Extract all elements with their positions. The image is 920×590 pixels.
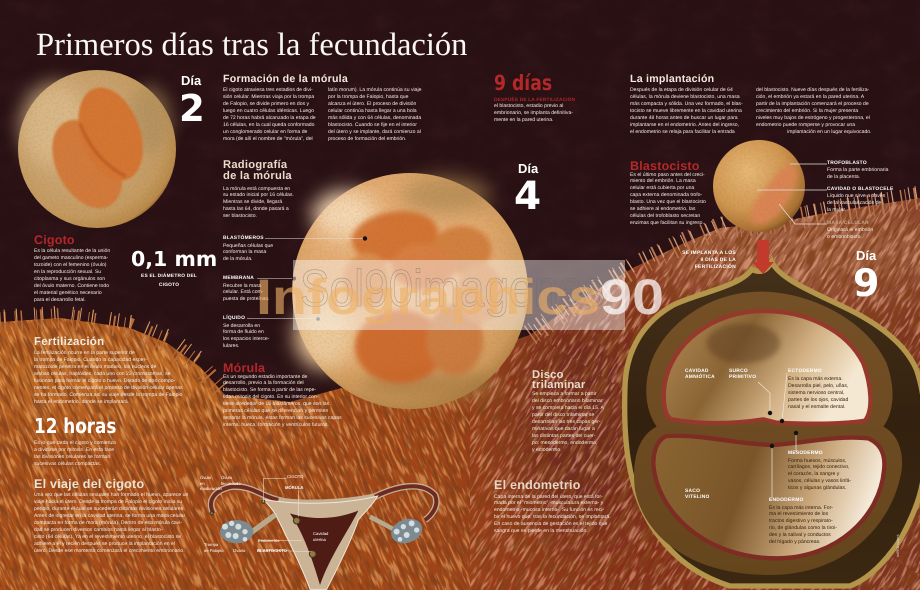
text: mesodermo: Forma huesos, músculos, <box>788 458 846 464</box>
text <box>223 322 270 349</box>
day 4 marker <box>514 161 541 219</box>
text <box>34 492 188 554</box>
label: ovario: Ovario <box>233 548 245 553</box>
text column 1 <box>223 87 316 142</box>
heading: Radiografía <box>223 159 287 171</box>
label: endometrio: Endometrio <box>258 538 279 543</box>
panel: radiografía de la mórula <box>223 159 294 219</box>
text column 2: alcanza el útero. El proceso de división <box>328 101 416 107</box>
text <box>494 103 573 123</box>
text: trofoblasto: de la placenta. <box>827 174 860 180</box>
text <box>34 248 110 303</box>
heading: Formación de la mórula <box>223 73 348 85</box>
embryo section labels <box>684 368 874 548</box>
day 9 marker <box>851 249 881 301</box>
text: en la reproducción sexual. Su <box>34 269 101 275</box>
text: celular está cubierta por una <box>630 185 694 191</box>
text: po: mesodermo, endodermo, <box>532 440 597 446</box>
text column 2: ción, el embrión ya estará en la pared uterina. A <box>756 94 864 100</box>
label: mórula: MÓRULA <box>285 485 303 490</box>
text: endodermo: tractos digestivo y respirato- <box>769 518 833 524</box>
label: trompa de falopio: de Falopio <box>204 548 224 553</box>
text: Recubre la masa <box>223 282 262 288</box>
illustration: blastocyst <box>713 140 805 232</box>
label: cavidad amniótica <box>685 369 715 382</box>
heading: BLASTÓMEROS <box>223 236 264 241</box>
text: ser blastocisto. <box>223 213 257 219</box>
text column 1: sión celular. Mientras viaja por la trompa <box>223 94 314 100</box>
text: endodermo: Es la capa más interna. For- <box>769 504 833 510</box>
text column 2 <box>756 87 872 135</box>
text: cisto (64 células). Ya en el revestimiento uterino, el blastocisto se <box>34 534 181 540</box>
text column 1: de Falopio, se divide primero en dos y <box>223 101 309 107</box>
text: bir el huevo que, tras la fecundación, se implantará. <box>494 514 611 520</box>
text <box>630 172 706 227</box>
label: óvulo fecundado: fecundado <box>221 481 241 486</box>
text: blasto. Una vez que el blastocisto <box>630 199 706 205</box>
label: cavidad amniótica: AMNIÓTICA <box>685 375 715 380</box>
text: Pequeñas células que <box>223 242 273 248</box>
text <box>34 350 183 405</box>
text: Se empieza a formar a partir <box>532 391 597 397</box>
text: tiene alrededor de 16 blastómeros, que son las <box>223 401 329 407</box>
text: desarrollan las tres capas ger- <box>532 419 601 425</box>
heading: Cigoto <box>34 233 75 247</box>
text: del gameto masculino (esperma- <box>34 255 108 261</box>
text: La mórula está compuesta en <box>223 186 290 192</box>
heading: Mórula <box>223 361 265 375</box>
label: líquido <box>223 314 320 349</box>
text: Se desarrolla en <box>223 322 260 328</box>
leaders and dots <box>684 368 874 548</box>
fur tips along the endometrium edge <box>0 192 920 395</box>
title: Primeros días tras la fecundación <box>36 27 467 63</box>
day 9 number: 9 <box>853 261 879 305</box>
yolk sac <box>653 436 884 558</box>
callout: se implanta: FERTILIZACIÓN <box>695 264 736 270</box>
text column 1: de 72 horas habrá alcanzado la etapa de <box>223 115 316 121</box>
text: endodermo: ma el revestimiento de los <box>769 511 828 517</box>
text column 1: Después de la etapa de división celular de 64 <box>630 87 733 93</box>
uterus diagram labels <box>200 474 328 553</box>
text column 1: durante 48 horas antes de buscar un lugar para <box>630 115 738 121</box>
text: periplo, durante el cual se sucederán distintas divisiones celulares. <box>34 506 185 512</box>
text column 1: tocisto se mueve libremente en la cavidad uterina <box>630 108 742 114</box>
text: capa externa denominada trofo- <box>630 192 702 198</box>
day 2 marker <box>179 73 205 130</box>
illustration: morula, day 4 <box>292 173 528 409</box>
text: separar la mórula, éstas forman las sucesivas capas <box>223 415 342 421</box>
label: saco vitelino: SACO <box>685 489 700 494</box>
label: óvulo en maduración <box>200 475 222 491</box>
label: surco primitivo: PRIMITIVO <box>729 375 756 380</box>
heading: El viaje del cigoto <box>34 477 144 491</box>
day 2 label: Día <box>181 73 201 88</box>
text column 2: blastocisto. Cuando se fije en el interior <box>328 122 417 128</box>
text: En caso de ausencia de gestación es el tejido que <box>494 521 607 527</box>
text <box>223 242 273 262</box>
text: enzimas que facilitan su ingreso. <box>630 220 704 226</box>
text: minativas que darán lugar a <box>532 426 595 432</box>
text: mada por el "miometrio" -musculatura externa- y <box>494 500 603 506</box>
panel: el endometrio <box>494 478 616 534</box>
caption: ES EL DIÁMETRO DEL <box>141 274 197 279</box>
text: trofoblasto <box>827 167 888 181</box>
heading: LÍQUIDO <box>223 316 245 321</box>
text: fusionan para formar el cigoto o huevo. Dotado de dos compo- <box>34 378 175 384</box>
text: mesodermo: el corazón, la sangre y <box>788 471 839 477</box>
callout: 0,1 mm <box>131 247 217 288</box>
text <box>223 186 294 219</box>
label: mesodermo: MESODERMO <box>788 451 823 456</box>
text: cavidad: de la vascularización de <box>827 200 881 206</box>
text: Es la célula resultante de la unión <box>34 248 110 254</box>
text column 2: celular continúa hasta llegar a una bola <box>328 108 417 114</box>
text column 1: 16 células, en la cual queda conformado <box>223 122 314 128</box>
text: ectodermo: sistema nervioso central, <box>788 390 844 396</box>
panel: disco trilaminar <box>532 370 620 454</box>
panel: fertilización <box>34 336 183 405</box>
leader and dot <box>265 236 368 241</box>
heading: MEMBRANA <box>223 276 254 281</box>
text: la trompa de Falopio. Cuando la capacidad esper- <box>34 357 147 363</box>
text: del disco embrionario bilaminar <box>532 398 602 404</box>
heading: El endometrio <box>494 478 581 492</box>
label: óvulo en maduración: Óvulo <box>200 475 211 480</box>
label: surco primitivo <box>729 369 756 382</box>
heading: trilaminar <box>532 379 585 391</box>
text: Una vez que las células sexuales han formado el huevo, aparece un <box>34 492 188 498</box>
text column 1: luego en cuatro células idénticas. Luego <box>223 108 314 114</box>
heading <box>532 370 585 390</box>
text: ectodermo: nasal y el esmalte dental. <box>788 404 845 410</box>
text column 2: del útero y se implante, dará comienzo al <box>328 129 421 135</box>
text: endodermo: rio, de glándulas como la tiroi- <box>769 525 837 531</box>
panel: blastocisto <box>630 159 706 226</box>
text: masa celular: Originará el embrión <box>827 227 873 233</box>
illustration: uterus diagram <box>210 478 436 589</box>
text: cavidad <box>827 193 885 214</box>
text: La fertilización ocurre en la parte superior de <box>34 350 135 356</box>
text: tidas mitosis del cigoto. En su interior con- <box>223 394 318 400</box>
heading <box>223 159 292 182</box>
text: trofoblasto: Forma la parte embrionaria <box>827 167 888 173</box>
blastocyst labels <box>757 160 892 242</box>
label: cavidad o blastocele: CAVIDAD O BLASTOCELE <box>827 187 894 192</box>
text: del óvulo materno. Contiene todo <box>34 283 109 289</box>
day 2 number: 2 <box>179 87 205 130</box>
text: cavidad: Líquido que sirve a través <box>827 193 885 199</box>
text column 2: más sólida y con 64 células, denominada <box>328 115 421 121</box>
leader and dot <box>257 276 296 280</box>
text: lulares. <box>223 343 239 349</box>
big number: 9 días <box>494 71 552 95</box>
text: puesta de proteínas. <box>223 296 269 302</box>
heading: Fertilización <box>34 336 104 348</box>
text: se adhiere al endometrio, las <box>630 206 695 212</box>
panel: 9 días <box>494 71 575 123</box>
illustration: zygote, day 2 <box>18 70 176 228</box>
text: Capa interna de la pared del útero, que está for- <box>494 494 603 500</box>
text: Antes de ingresar en la cavidad uterina, se forma una masa celular <box>34 513 185 519</box>
text: útero. Desde ese momento comenzará el crecimiento embrionario. <box>34 548 185 554</box>
label: cavidad uterina <box>313 531 328 542</box>
text: se ha formado. Comienza así su viaje desde la trompa de Falopio <box>34 392 182 398</box>
text: a dividirse por mitosis. En esta fase <box>34 447 114 453</box>
text: el material genético necesario <box>34 290 102 296</box>
label: surco primitivo: SURCO <box>729 369 748 374</box>
number: 0,1 mm <box>131 247 217 271</box>
label: cavidad uterina: Cavidad <box>313 531 328 536</box>
illustration: implanted embryo cross-section, day 9 <box>625 262 920 586</box>
day 4 label: Día <box>518 161 538 176</box>
text column 2: endometrio puede romperse y provocar una <box>756 122 855 128</box>
watermark band <box>293 260 625 330</box>
day 4 number: 4 <box>514 174 541 219</box>
text: dad se producen diversos cambios hasta llegar al blasto- <box>34 527 163 533</box>
leader and dot <box>247 317 320 321</box>
text: citoplasma y sus orgánulos son <box>34 276 105 282</box>
text column 2: partir de la implantación comenzará el proceso de <box>756 101 869 107</box>
text: y se completa hacia el día 15. A <box>532 405 604 411</box>
label: óvulo en maduración: en <box>200 481 205 486</box>
text column 2 <box>328 87 422 142</box>
subheading: DESPUÉS DE LA FERTILIZACIÓN <box>494 96 575 102</box>
callout: se implanta <box>680 250 736 270</box>
panel: el viaje del cigoto <box>34 477 188 554</box>
label: óvulo fecundado <box>221 475 241 486</box>
text: endodermo: des y la salival y conductos <box>769 532 831 538</box>
text: hasta el endometrio, donde se implantará. <box>34 399 129 405</box>
label: ectodermo: ECTODERMO <box>788 369 822 374</box>
text: endometrio -mucosa interna-. Su función es reci- <box>494 507 604 513</box>
callout: se implanta: 9 DÍAS DE LA <box>700 257 736 263</box>
credit: sol90images <box>895 535 900 557</box>
fur: endometrium tissue <box>0 190 920 590</box>
text: ectodermo: partes de los ojos, cavidad <box>788 397 848 403</box>
label: saco vitelino <box>685 489 710 502</box>
label: trompa de falopio <box>204 542 224 553</box>
text: matozoide penetra en el óvulo maduro, los núcleos de <box>34 364 156 370</box>
text: mesodermo: vasos, células y vasos linfá- <box>788 478 851 484</box>
text: los espacios interce- <box>223 336 269 342</box>
text: masa celular <box>827 227 873 241</box>
callout: se implanta: SE IMPLANTA A LOS <box>682 250 736 256</box>
label: óvulo fecundado: Óvulo <box>221 475 232 480</box>
text: compacta en forma de mora (mórula). Dentro de esa mórula cavi- <box>34 520 182 526</box>
text: conforman la masa <box>223 249 266 255</box>
panel: cigoto <box>34 233 110 303</box>
text: forma de fluido en <box>223 329 264 335</box>
day 9 label: Día <box>856 248 876 263</box>
text column 2: implantación en un lugar equivocado. <box>787 129 872 135</box>
text: sucesivas células compactas. <box>34 461 101 467</box>
text: ambas células, haploides, cada uno con 23 cromosomas, se <box>34 371 170 377</box>
label: masa celular: MASA CELULAR <box>827 221 869 226</box>
text column 1: células, la mórula deviene blastocisto, una masa <box>630 94 740 100</box>
text <box>532 391 604 454</box>
amniotic cavity <box>664 311 870 424</box>
text column 1 <box>630 87 743 135</box>
text column 2: crecimiento del embrión. Si la mujer presenta <box>756 108 858 114</box>
number: 12 horas <box>34 414 116 438</box>
panel: formación de la mórula <box>223 73 422 142</box>
caption <box>141 272 197 288</box>
caption: CIGOTO <box>159 283 179 288</box>
text column 1: El cigoto atraviesa tres estadios de divi- <box>223 87 313 93</box>
text column 2: niveles muy bajos de estrógeno y progesterona, el <box>756 115 870 121</box>
text: cavidad: la mujer. <box>827 207 846 213</box>
text: viaje hacia el útero. Desde la trompa de Falopio el cigoto inicia su <box>34 499 182 505</box>
text: el blastocisto, estadio previo al <box>494 103 563 109</box>
text: sangra que se pierde en la menstruación. <box>494 528 588 534</box>
text: interna, hueca, formación y ventrículos futuros. <box>223 422 329 428</box>
text: de la mórula. <box>223 256 252 262</box>
arrow: implantation <box>752 240 774 274</box>
text: partir del disco trilaminar se <box>532 412 594 418</box>
label: saco vitelino: VITELINO <box>685 495 710 500</box>
heading: Disco <box>532 369 564 381</box>
heading: Blastocisto <box>630 159 700 173</box>
text: Es el último paso antes del creci- <box>630 172 705 178</box>
text <box>34 440 116 467</box>
label: cavidad uterina: uterina <box>313 537 326 542</box>
text: primeras células que se diferencian y permiten <box>223 408 328 414</box>
text: hasta las 64, donde pasará a <box>223 206 289 212</box>
text: blastocisto. Se forma a partir de las repe- <box>223 387 316 393</box>
text: Es un segundo estadio importante de <box>223 374 307 380</box>
text: ectodermo: Desarrolla piel, pelo, uñas, <box>788 383 848 389</box>
text <box>494 494 611 535</box>
text <box>223 374 342 428</box>
text column 1: mora (de allí el nombre de "mórula", del <box>223 136 313 142</box>
label: blastómeros <box>223 234 368 262</box>
text: las divisiones celulares se forman <box>34 454 110 460</box>
label: cavidad amniótica: CAVIDAD <box>685 369 709 374</box>
leader lines <box>757 160 829 230</box>
uterine wall shell <box>625 262 920 586</box>
text: Es lo que tarda el cigoto y comienza <box>34 440 116 446</box>
text column 2: proceso de formación del embrión. <box>328 136 406 142</box>
text column 1: implantarse en el endometrio. Antes del ingreso, <box>630 122 739 128</box>
text: tozoide) con el femenino (óvulo) <box>34 262 106 268</box>
heading: de la mórula <box>223 170 292 182</box>
embryonic disc lobes <box>634 292 902 575</box>
label: membrana <box>223 276 296 302</box>
text: las distintas partes del cuer- <box>532 433 595 439</box>
panel: la implantación <box>630 73 872 135</box>
text: ectodermo <box>788 376 848 411</box>
text: y ectodermo. <box>532 447 561 453</box>
text: células del trofoblasto secretan <box>630 213 700 219</box>
text: masa celular: o embrioblasto. <box>827 234 862 240</box>
text: celular. Está com- <box>223 289 263 295</box>
text: su estado inicial por 16 células. <box>223 192 294 198</box>
text: nentes, el cigoto comenzará el proceso de división celular apenas <box>34 385 183 391</box>
text: endodermo <box>769 504 837 546</box>
text: endodermo: del hígado y páncreas. <box>769 539 821 545</box>
heading: La implantación <box>630 73 714 85</box>
text: embrionario, se implanta definitiva- <box>494 110 573 116</box>
text: miento del embrión. La masa <box>630 178 696 184</box>
text: mesodermo: cartílagos, tejido conectivo, <box>788 464 849 470</box>
text: adhiere a él y recién después se produce la implantación en el <box>34 541 175 547</box>
label: óvulo en maduración: maduración <box>200 486 222 491</box>
text: Mientras se divide, llegará <box>223 199 282 205</box>
panel: mórula <box>223 361 342 428</box>
text: mesodermo: ticos y algunas glándulas. <box>788 485 846 491</box>
label: blastocisto: BLASTOCISTO <box>257 548 287 553</box>
watermark outline text: Sol90imagenes <box>300 260 605 318</box>
label: trompa de falopio: Trompa <box>204 542 218 547</box>
text <box>223 282 269 302</box>
label: cigoto: CIGOTO <box>287 474 303 479</box>
label: trofoblasto: TROFOBLASTO <box>827 161 867 166</box>
text: mente en la pared uterina. <box>494 117 553 123</box>
watermark logo text: Infographics 90 <box>256 269 664 325</box>
text column 2: latín morum). La mórula continúa su viaje <box>328 87 421 93</box>
text: mesodermo <box>788 458 851 492</box>
text: desarrollo, previo a la formación del <box>223 380 304 386</box>
callout: 12 horas <box>34 414 116 467</box>
text column 2: por la trompa de Falopio, hasta que <box>328 94 408 100</box>
text column 1: el endometrio se relaja para facilitar la entrada <box>630 129 735 135</box>
text: ectodermo: Es la capa más externa. <box>788 376 843 382</box>
text column 2: del blastocisto. Nueve días después de la fertiliza- <box>756 87 869 93</box>
text column 1: más compacta y sólida. Una vez formado, el blas- <box>630 101 743 107</box>
label: endodermo: ENDODERMO <box>769 498 804 503</box>
text: para el desarrollo fetal. <box>34 297 86 303</box>
text column 1: un conglomerado celular en forma de <box>223 129 307 135</box>
